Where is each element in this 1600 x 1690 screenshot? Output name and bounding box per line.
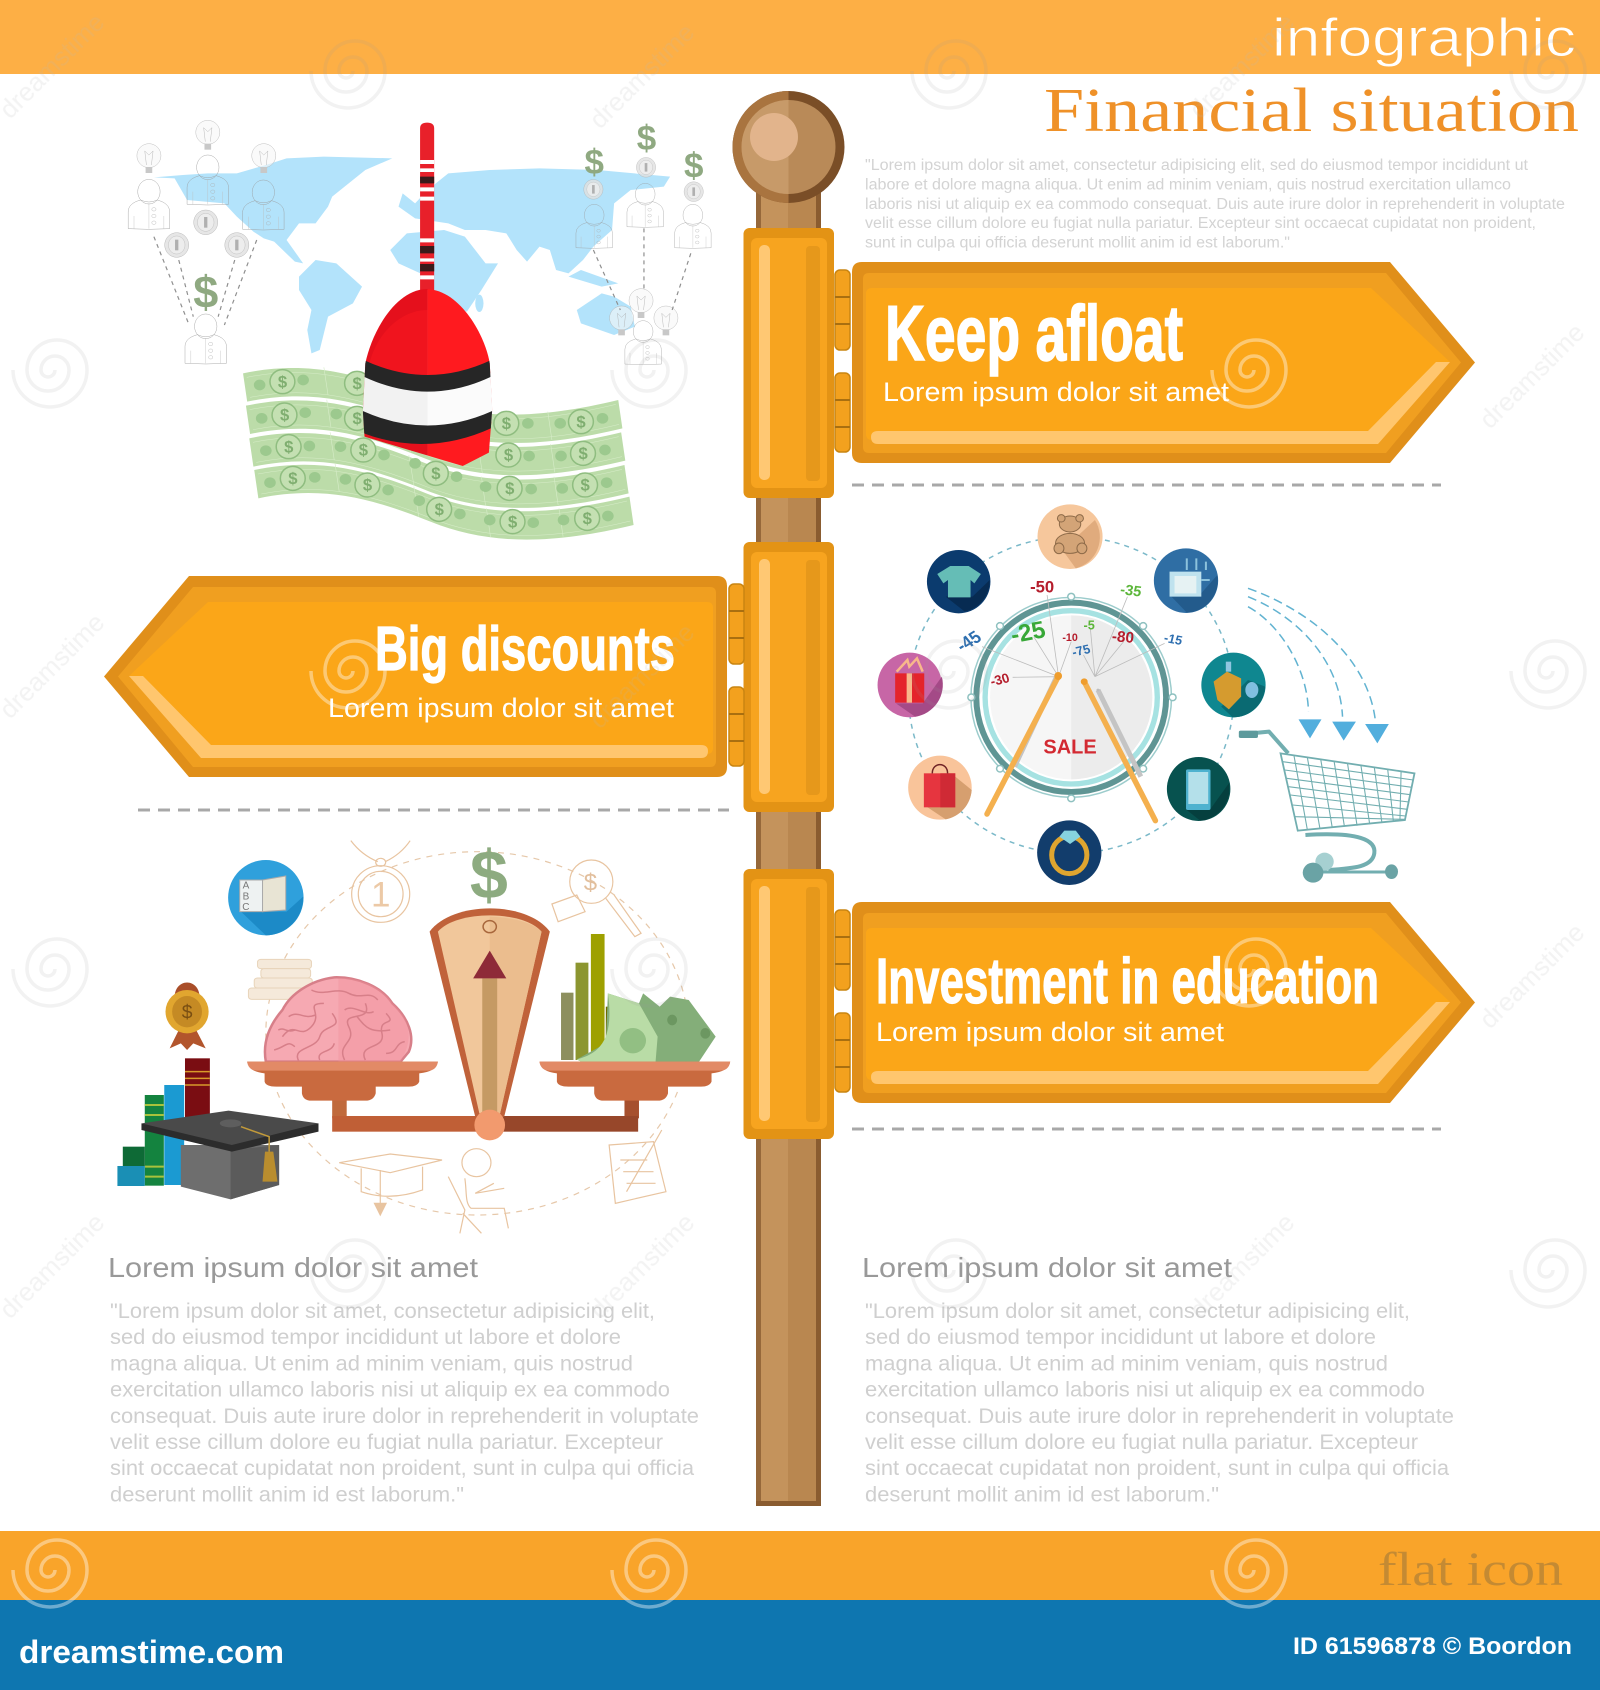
- icon: shopping bag: [908, 756, 972, 820]
- text: dreamstime: [1473, 317, 1590, 434]
- sign: Keep afloat: Lorem ipsum dolor sit amet: [883, 377, 1230, 407]
- lower right text block: deserunt mollit anim id est laborum.": [865, 1482, 1219, 1506]
- icon: paper stack outline: [248, 959, 312, 999]
- icon: book circle: B: [243, 891, 250, 902]
- dollar bills: $: [278, 372, 288, 391]
- title: Financial situation: [1044, 77, 1579, 145]
- right network of people: $: [637, 119, 656, 158]
- sale drum: -50: [1030, 578, 1054, 597]
- right network of people: [576, 119, 711, 365]
- fishing float: [357, 123, 498, 473]
- lower left text block: Lorem ipsum dolor sit amet: [108, 1252, 478, 1283]
- icon: award badge: [166, 982, 209, 1050]
- icon: paper and quill outline: [609, 1130, 666, 1203]
- lower left text block: magna aliqua. Ut enim ad minim veniam, quis nostrud: [110, 1352, 633, 1376]
- icon: shirt: [927, 550, 990, 613]
- bottom orange band: [0, 1531, 1600, 1600]
- sale drum: -5: [1084, 618, 1095, 632]
- dollar bills: $: [578, 444, 588, 463]
- lower left text block: consequat. Duis aute irure dolor in reprehenderit in voluptate: [110, 1404, 699, 1428]
- dollar bills: $: [505, 479, 515, 498]
- lower left text block: exercitation ullamco laboris nisi ut aliquip ex ea commodo: [110, 1378, 670, 1402]
- icon: book circle: [228, 860, 304, 935]
- dollar sign: $: [470, 837, 508, 913]
- sale drum: [952, 578, 1184, 821]
- icon: medal outline: [351, 841, 410, 922]
- illustration: education versus money scale: [117, 837, 730, 1233]
- lower right text block: exercitation ullamco laboris nisi ut aliquip ex ea commodo: [865, 1378, 1425, 1402]
- dashed ring: [909, 537, 1234, 853]
- icon: student outline: [448, 1149, 508, 1233]
- sale drum: -45: [952, 627, 986, 656]
- dollar bills: [243, 367, 634, 540]
- sign: Big discounts: [104, 542, 834, 812]
- text: dreamstime: [1183, 1207, 1300, 1324]
- icon: tablet: [1154, 548, 1218, 613]
- lower right text block: magna aliqua. Ut enim ad minim veniam, quis nostrud: [865, 1352, 1388, 1376]
- illustration: sale drum with product icons and cart: [878, 504, 1414, 885]
- sale drum: -80: [1111, 628, 1135, 647]
- lower right text block: "Lorem ipsum dolor sit amet, consectetur adipisicing elit,: [865, 1299, 1410, 1323]
- icon: perfume: [1201, 653, 1266, 717]
- dashed ring: [266, 852, 689, 1215]
- icon: teddy bear: [1038, 504, 1103, 569]
- icon: graduation cap outline: [339, 1154, 442, 1215]
- right network of people: $: [684, 146, 703, 185]
- icon: book circle: A: [243, 881, 250, 892]
- lower left text block: "Lorem ipsum dolor sit amet, consectetur adipisicing elit,: [110, 1299, 655, 1323]
- header word: infographic: infographic: [1272, 8, 1576, 68]
- intro paragraph: "Lorem ipsum dolor sit amet, consectetur adipisicing elit, sed do eiusmod tempor incididunt ut: [865, 157, 1529, 174]
- left network of people: $: [193, 266, 218, 317]
- footer word: flat icon: flat icon: [1378, 1543, 1563, 1596]
- left network of people: [128, 120, 284, 364]
- lower right text block: Lorem ipsum dolor sit amet: [862, 1252, 1232, 1283]
- sale drum: -25: [1008, 616, 1048, 649]
- intro paragraph: velit esse cillum dolore eu fugiat nulla pariatur. Excepteur sint occaecat cupidatat non proident,: [865, 215, 1536, 232]
- dollar bills: $: [502, 414, 512, 433]
- text: dreamstime: [1183, 7, 1300, 124]
- balance scale: [247, 908, 730, 1140]
- intro paragraph: sunt in culpa qui officia deserunt mollit anim id est laborum.": [865, 234, 1290, 252]
- sign: Keep afloat: [744, 228, 1475, 498]
- world map: [154, 157, 670, 353]
- dollar bills: $: [576, 412, 586, 431]
- top header band: [0, 0, 1600, 74]
- sign: Big discounts: Lorem ipsum dolor sit amet: [328, 693, 675, 723]
- dollar bills: $: [435, 500, 445, 519]
- dollar bills: $: [353, 409, 363, 428]
- sign: Keep afloat: Keep afloat: [885, 289, 1183, 377]
- lower right text block: [862, 1252, 1454, 1506]
- sign: Big discounts: Big discounts: [375, 615, 675, 684]
- dollar bills: $: [583, 509, 593, 528]
- sale drum: -15: [1163, 631, 1184, 648]
- lower right text block: sint occaecat cupidatat non proident, sunt in culpa qui officia: [865, 1456, 1449, 1480]
- chart bars: [561, 934, 619, 1060]
- pole knob: [732, 91, 844, 203]
- dollar bills: $: [508, 512, 518, 531]
- sale drum: -35: [1119, 582, 1143, 601]
- intro paragraph: [865, 157, 1565, 252]
- shopping cart: [1239, 731, 1414, 883]
- sign: Investment in education: [744, 869, 1475, 1139]
- sale drum: -10: [1062, 632, 1078, 644]
- illustration: float on money over world map: [128, 119, 711, 540]
- lower right text block: velit esse cillum dolore eu fugiat nulla pariatur. Excepteur: [865, 1430, 1418, 1454]
- dollar bills: $: [581, 476, 591, 495]
- lower right text block: sed do eiusmod tempor incididunt ut labore et dolore: [865, 1325, 1376, 1349]
- dollar bills: $: [359, 441, 369, 460]
- dollar bills: $: [288, 469, 298, 488]
- icon: medal outline: 1: [371, 876, 390, 915]
- falling arrows: [1248, 588, 1389, 743]
- sale drum: -75: [1070, 642, 1092, 660]
- dollar bills: $: [280, 406, 290, 425]
- credit: image id: ID 61596878 © Boordon: [1293, 1633, 1572, 1660]
- icon: brain: [265, 977, 411, 1062]
- dollar bills: $: [431, 464, 441, 483]
- lower left text block: sed do eiusmod tempor incididunt ut labore et dolore: [110, 1325, 621, 1349]
- icon: award badge: $: [182, 1002, 193, 1023]
- sale drum: -30: [988, 670, 1011, 689]
- sign: Investment in education: Lorem ipsum dolor sit amet: [876, 1017, 1225, 1047]
- sale drum: SALE: [1043, 736, 1097, 758]
- blue credit bar: [0, 1600, 1600, 1690]
- text: dreamstime: [583, 17, 700, 134]
- text: dreamstime: [583, 617, 700, 734]
- icon: magnifier outline: [552, 860, 641, 937]
- lower left text block: sint occaecat cupidatat non proident, sunt in culpa qui officia: [110, 1456, 694, 1480]
- dollar bills: $: [504, 446, 514, 465]
- icon: books and graduation cap: [117, 1058, 318, 1199]
- icon: phone: [1167, 757, 1230, 821]
- dollar bills: $: [353, 374, 363, 393]
- signpost pole: [756, 190, 821, 1506]
- icon: magnifier outline: $: [584, 870, 597, 897]
- sign: Investment in education: Investment in education: [876, 945, 1379, 1017]
- icon: diamond ring: [1037, 820, 1101, 885]
- dollar bills: $: [363, 476, 373, 495]
- icon: gift: [878, 653, 943, 717]
- lower left text block: velit esse cillum dolore eu fugiat nulla pariatur. Excepteur: [110, 1430, 663, 1454]
- credit: site name: dreamstime.com: [19, 1634, 284, 1670]
- text: dreamstime: [1473, 917, 1590, 1034]
- text: dreamstime: [583, 1207, 700, 1324]
- intro paragraph: labore et dolore magna aliqua. Ut enim ad minim veniam, quis nostrud exercitation ullamco: [865, 176, 1511, 194]
- lower left text block: deserunt mollit anim id est laborum.": [110, 1482, 464, 1506]
- lower right text block: consequat. Duis aute irure dolor in reprehenderit in voluptate: [865, 1404, 1454, 1428]
- money pile: [577, 993, 716, 1062]
- intro paragraph: laboris nisi ut aliquip ex ea commodo consequat. Duis aute irure dolor in reprehenderit in voluptate: [865, 196, 1565, 213]
- lower left text block: [108, 1252, 699, 1506]
- dollar bills: $: [284, 437, 294, 456]
- icon: book circle: C: [242, 902, 250, 913]
- right network of people: $: [584, 143, 604, 182]
